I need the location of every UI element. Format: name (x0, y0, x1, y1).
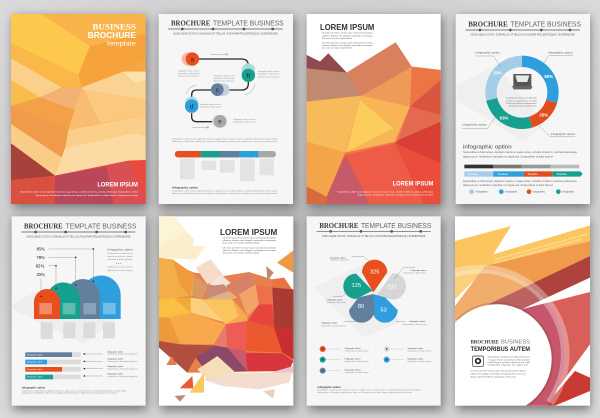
cover title text: Ut enim ad minim veniam quis nostrud exercitation (322, 41, 373, 44)
donut centre text (506, 97, 538, 108)
bar leaders and notes: Infographic option (107, 365, 123, 368)
cover footer text: LOREM IPSUM (97, 182, 138, 188)
header: TEMPLATE BUSINESS (361, 223, 432, 230)
cover title text: ullamco laboris nisi aliquip commodo consequat (322, 44, 373, 47)
bar leaders and notes (83, 350, 138, 378)
donut centre text: ut tellus in pulvinar pellentesque (506, 102, 538, 105)
legend items: Suspendisse a dolor laoreet (345, 360, 369, 363)
petal callouts: Infographic option (409, 320, 425, 323)
legend items: Infographic option (345, 369, 360, 372)
header: NUNC AQUE UCTOS | CONVALLIS UT TELLUS | PULVINAR PELLENTESQUE | SUSPENDISSE (471, 34, 575, 37)
cover title text: LOREM IPSUM (320, 23, 375, 32)
slanted cover text: Suspendisse a dolor laoreet, dignissim mauris et, augue lectus, convallis ut tellus in pulvinar (493, 233, 588, 262)
cover title: BROCHURE (88, 31, 137, 40)
step a (182, 52, 199, 66)
header (317, 222, 432, 238)
header: TEMPLATE BUSINESS (213, 21, 284, 28)
petal callouts: Infographic option (327, 298, 342, 301)
legend: Infographic (533, 191, 546, 194)
side note (107, 249, 134, 272)
footer text (172, 186, 278, 195)
cover heading: BUSINESS (501, 339, 530, 345)
donut centre text: aliquet purus vestibulum (508, 105, 537, 108)
cover title text: Ut enim ad minim veniam quis nostrud exercitation (322, 32, 373, 35)
donut callouts: Infographic option (475, 52, 501, 55)
horizontal bar chart: Infographic option (27, 368, 43, 371)
panel: petal chart brochure (307, 216, 441, 406)
cover title text: LOREM IPSUM (220, 228, 278, 237)
cover title: BUSINESS (92, 22, 136, 31)
petal callouts: Infographic option (321, 322, 337, 325)
bar leaders and notes: Infographic option (107, 350, 123, 353)
legend: Infographic (475, 191, 488, 194)
bar leaders and notes: Infographic option (107, 358, 123, 361)
ribbon note: aliquet purus. Vestibulum vulputate nec ligula sed. Suspendisse ut dolor laoreet (463, 184, 553, 187)
step notes: Suspendisse a dolor laoreet (233, 121, 256, 124)
donut chart: 63% (500, 115, 508, 120)
legend items: Infographic option (407, 347, 423, 350)
section heading and text (463, 144, 578, 159)
legend items: Suspendisse a dolor laoreet (407, 349, 432, 352)
footer text: Suspendisse a dolor laoreet, dignissim mauris et, augue lectus, convallis ut tellus in, pulvinar pellentesque ut dolor aliquet (172, 189, 278, 192)
panel: scattered polygon cover (159, 216, 293, 406)
flow connector (192, 59, 248, 122)
colour ribbon: Templates (556, 173, 568, 176)
cover title (88, 22, 137, 48)
cover footer text: aliquet purus. Vestibulum vulputate nec ligula sed. Suspendisse ut dolor laoreet, aliquet purus lorem (35, 194, 138, 197)
step notes: dignissim mauris augue lectus (258, 75, 279, 78)
white circle (455, 304, 552, 406)
cover body text: pellentesque ut dolor aliquet purus nulla (488, 361, 531, 364)
percentage labels and leaders: 65% (36, 264, 45, 269)
side note: • • • (116, 261, 121, 265)
side note: dignissim mauris augue (107, 255, 134, 258)
panel: faceted cover brochure (307, 14, 441, 204)
donut callouts: Infographic option (462, 124, 488, 127)
percentage labels and leaders: 25% (37, 272, 45, 277)
cover title: template (107, 41, 136, 48)
footer text: Infographic option (22, 385, 46, 389)
icon: laptop (512, 74, 533, 89)
footer text: aliquet purus. Vestibulum vulputate nec ligula sed. Suspendisse ut dolor laoreet, aliquet purus lorem ipsum dolor sit amet (172, 192, 278, 195)
horizontal bar chart (25, 352, 81, 379)
segmented bar (175, 151, 276, 157)
colour ribbon: Templates (497, 173, 509, 176)
cover body text: Suspendisse a dolor laoreet dignissim mauris (488, 356, 530, 359)
cover footer text (20, 182, 138, 197)
step d (185, 97, 198, 113)
step notes: Infographic option sit amet (213, 74, 235, 77)
donut chart (485, 56, 559, 129)
legend items: Suspendisse a dolor laoreet (345, 371, 369, 374)
cover title text: duis aute irure dolor reprehenderit (322, 47, 352, 50)
cover title text: ullamco laboris nisi aliquip commodo consequat (322, 34, 373, 37)
cover body text (471, 356, 531, 379)
step notes: Suspendisse a dolor laoreet, dignissim mauris et, augue lectus, convallis ut tellus in, pulvinar pellentesque ut dolor aliquet (172, 137, 278, 140)
header: NUNC AQUE UCTOS | CONVALLIS UT TELLUS | PULVINAR PELLENTESQUE | SUSPENDISSE (173, 33, 278, 36)
footer text: Infographic option (317, 385, 341, 389)
side note: Suspendisse a dolor laoreet (107, 252, 133, 255)
cover heading: TEMPORIBUS AUTEM (471, 347, 530, 353)
header: BROCHURE (468, 21, 508, 29)
petal callouts: Suspendisse a dolor laoreet (403, 323, 427, 326)
legend items: Infographic option (407, 358, 423, 361)
cover title text: ullamco laboris nisi aliquip commodo consequat (223, 249, 277, 252)
panel: orange cover brochure (11, 14, 146, 204)
cover title text: duis aute irure dolor reprehenderit (223, 242, 260, 245)
petal chart: 125 (352, 283, 361, 289)
donut chart: 70% (493, 71, 502, 76)
donut centre text: Suspendisse a dolor laoreet dignissim (506, 97, 537, 100)
horizontal bar chart: Infographic option (27, 353, 43, 356)
bar leaders and notes: Suspendisse a dolor laoreet dignissim (107, 375, 138, 378)
donut centre text: mauris et augue lectus convallis (506, 99, 537, 102)
slanted cover text: aliquet purus. Vestibulum vulputate nec ligula sed. Suspendisse ut dolor (494, 238, 582, 265)
petal callouts: Infographic option (411, 269, 426, 272)
arch captions (41, 322, 115, 339)
step notes: dignissim mauris augue lectus (213, 79, 235, 82)
bar leaders and notes: Suspendisse a dolor laoreet dignissim (107, 353, 138, 356)
percentage labels and leaders (36, 247, 94, 297)
horizontal bar chart: Infographic option (27, 376, 43, 379)
section heading and text: Suspendisse a dolor laoreet, dignissim mauris et, augue lectus, convallis ut tellus in, pulvinar pellentesque (463, 151, 578, 154)
header: TEMPLATE BUSINESS (510, 22, 581, 29)
cover heading (471, 339, 530, 353)
legend items: Infographic option (345, 358, 360, 361)
legend: Infographic (562, 191, 575, 194)
footer text: aliquet purus. Vestibulum vulputate nec ligula sed. Suspendisse ut dolor laoreet, aliquet purus lorem ipsum (317, 391, 412, 394)
petal callouts: Suspendisse a dolor laoreet (321, 324, 346, 327)
cover title text: Ut enim ad minim veniam quis nostrud exercitation (223, 236, 276, 239)
petal chart: 231 (387, 284, 397, 290)
step notes: Infographic option sit amet (200, 103, 222, 106)
petal callouts: Suspendisse a dolor laoreet (330, 259, 350, 262)
header (168, 20, 284, 36)
percentage labels and leaders: 70% (37, 255, 45, 260)
colour ribbon: Templates (527, 173, 539, 176)
grey progress bar (464, 165, 579, 168)
petal chart: 80 (358, 304, 364, 310)
step notes (172, 69, 280, 143)
icon: gear badge (473, 356, 483, 366)
cover title text: duis aute irure dolor reprehenderit (322, 37, 352, 40)
cover title text (320, 23, 375, 50)
step d: d (190, 103, 194, 110)
cover title text: duis aute irure dolor reprehenderit (223, 252, 260, 255)
header: NUNC AQUE UCTOS | CONVALLIS UT TELLUS | PULVINAR PELLENTESQUE | SUSPENDISSE (322, 235, 426, 238)
long shadow (12, 292, 121, 344)
step notes: Suspendisse a dolor laoreet (258, 73, 280, 76)
section heading and text: aliquet purus. Vestibulum vulputate nec ligula sed. Suspendisse ut dolor laoreet (463, 156, 553, 159)
side note: convallis ut tellus pulvinar (107, 258, 133, 261)
header (466, 21, 581, 37)
step notes: aliquet purus. Vestibulum vulputate nec ligula sed. Suspendisse ut dolor laoreet, aliquet purus lorem ipsum dolor sit amet (172, 140, 278, 143)
petal callouts: Suspendisse a dolor laoreet (327, 301, 346, 304)
legend items (320, 346, 432, 374)
header: BROCHURE (171, 20, 211, 28)
polygon artwork (159, 216, 293, 402)
panel: flow diagram brochure (159, 14, 293, 204)
step notes: Suspendisse a dolor laoreet (178, 72, 200, 75)
step c (211, 83, 230, 96)
cover footer text: Suspendisse a dolor laoreet, dignissim mauris et, augue lectus, convallis ut tellus in, pulvinar pellentesque. Suspendisse ut dolor (20, 191, 138, 194)
cover body text: laboris nisi aliquip commodo consequat duis aute irure (471, 372, 527, 375)
step notes: Infographic option sit amet (178, 69, 200, 72)
cover heading: BROCHURE (471, 339, 499, 345)
bar columns (180, 159, 274, 181)
step notes: Suspendisse a dolor laoreet (200, 106, 222, 109)
footer text (22, 385, 127, 395)
legend items: Infographic option (345, 347, 360, 350)
step c: c (216, 87, 220, 94)
panel: arches chart brochure (12, 216, 146, 406)
step notes: dignissim mauris augue lectus (178, 75, 199, 78)
petal chart: 53 (381, 307, 387, 313)
arrows (186, 53, 255, 128)
footer text: Suspendisse a dolor laoreet, dignissim mauris et, augue lectus, convallis ut tellus in, pulvinar pellentesque ut dolor aliquet (22, 389, 127, 392)
footer text (317, 385, 421, 394)
side note: Infographic option (107, 249, 134, 252)
step e (212, 115, 227, 128)
long shadow (457, 65, 545, 142)
cover body text: Ut enim ad minim veniam quis nostrud exercitation ullamco (471, 369, 527, 372)
legend: Infographic (505, 191, 518, 194)
bar leaders and notes: Suspendisse a dolor laoreet dignissim (107, 367, 138, 370)
bar leaders and notes: Infographic option (107, 373, 123, 376)
footer text: Suspendisse a dolor laoreet, dignissim mauris et, augue lectus, convallis ut tellus in, pulvinar pellentesque ut dolor aliquet (317, 389, 421, 392)
legend items: Suspendisse a dolor laoreet (345, 349, 369, 352)
petal chart (343, 260, 406, 323)
petal callouts: Infographic option (330, 256, 346, 259)
bar leaders and notes: Suspendisse a dolor laoreet dignissim (107, 360, 138, 363)
section heading and text: infographic option (463, 144, 512, 150)
cover footer text: Suspendisse a dolor laoreet, dignissim mauris et, augue lectus, convallis ut tellus in, pulvinar pellentesque (337, 190, 434, 193)
step notes: Suspendisse a dolor laoreet (213, 77, 235, 80)
step notes: Infographic option sit amet (233, 118, 256, 121)
donut chart: 25% (539, 113, 548, 118)
panel: circle cutout cover (455, 216, 590, 406)
step a: a (190, 56, 194, 63)
header: TEMPLATE BUSINESS (66, 223, 137, 230)
cover footer text: LOREM IPSUM (393, 181, 433, 187)
header (21, 222, 137, 239)
side note: dignissim mauris augue (107, 269, 134, 272)
cover title text (220, 228, 278, 255)
step b: b (246, 73, 250, 80)
cover title text: ullamco laboris nisi aliquip commodo consequat (223, 239, 277, 242)
arches chart (34, 275, 121, 319)
header: NUNC AQUE UCTOS | CONVALLIS UT TELLUS | PULVINAR PELLENTESQUE | SUSPENDISSE (27, 236, 131, 239)
donut callouts: Infographic option (548, 51, 574, 54)
percentage labels and leaders: 85% (37, 247, 45, 252)
footer text: Infographic option (172, 186, 198, 190)
cover footer text: aliquet purus. Vestibulum vulputate nec ligula sed. Suspendisse ut dolor (357, 194, 434, 197)
legend (469, 189, 575, 194)
horizontal bar chart: Infographic option (27, 361, 43, 364)
colour ribbon (464, 171, 583, 177)
petal callouts (321, 256, 427, 327)
donut callouts (462, 51, 576, 137)
step notes: Infographic option sit amet (258, 70, 280, 73)
footer text: aliquet purus. Vestibulum vulputate nec ligula sed. Suspendisse ut dolor laoreet, aliquet purus lorem ipsum (22, 392, 117, 395)
side note: Suspendisse a dolor laoreet (107, 266, 133, 269)
step b (242, 63, 255, 82)
donut chart: 85% (544, 74, 553, 79)
colour ribbon: Templates (467, 173, 479, 176)
step e: e (218, 119, 222, 126)
legend items: Suspendisse a dolor laoreet (407, 360, 432, 363)
cover body text: dolor reprehenderit voluptate velit esse (471, 376, 517, 379)
panel: donut chart brochure (456, 14, 590, 204)
header: BROCHURE (319, 222, 359, 230)
cover body text: et augue lectus convallis ut tellus pulvinar (488, 358, 530, 361)
ribbon note: Suspendisse a dolor laoreet, dignissim mauris et, augue lectus, convallis ut tellus in, pulvinar pellentesque (463, 180, 578, 183)
cover body text: vestibulum vulputate nec ligula sed (488, 364, 528, 367)
ribbon note (463, 180, 578, 187)
donut callouts: Infographic option (551, 133, 576, 136)
cover footer text (337, 181, 434, 197)
long shadow (313, 264, 400, 337)
petal chart: 325 (370, 270, 379, 276)
header: BROCHURE (24, 222, 63, 230)
cover title text: Ut enim ad minim veniam quis nostrud exercitation (223, 246, 276, 249)
petal callouts: Suspendisse a dolor laoreet (403, 271, 426, 274)
